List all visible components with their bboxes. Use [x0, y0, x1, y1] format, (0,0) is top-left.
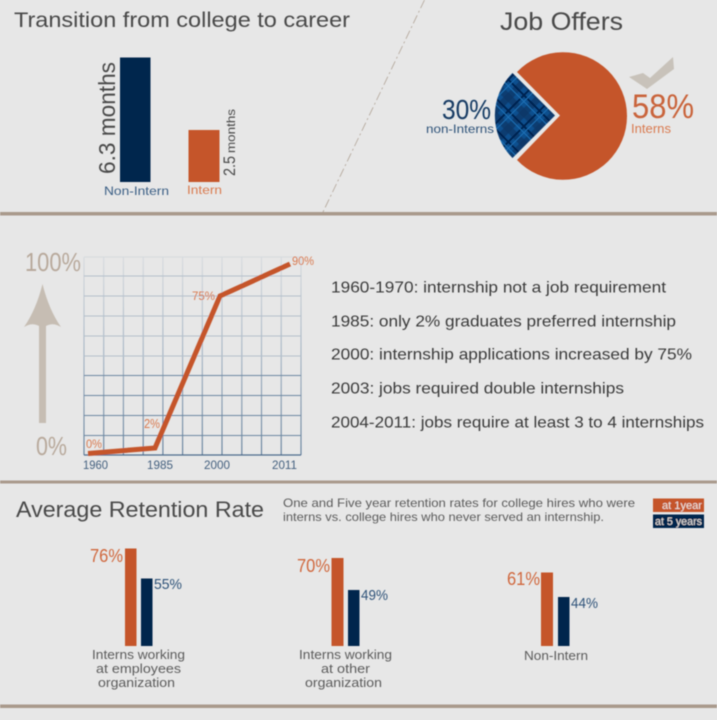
x-axis labels: 2000	[204, 458, 230, 472]
pie slice: interns	[517, 52, 627, 180]
label: 0%: 0%	[36, 431, 67, 461]
panel: job offers	[426, 8, 694, 180]
value: 30% non-interns: non-Interns	[426, 122, 494, 136]
group: non-intern	[507, 569, 598, 663]
arrow: 0 to 100 percent scale	[24, 284, 61, 423]
point labels: 90%	[292, 254, 314, 268]
trend line	[88, 264, 290, 454]
group: interns at employer: Interns working	[92, 647, 185, 662]
group: interns at other organization: 49%	[361, 587, 388, 604]
group: interns at other organization: at other	[321, 661, 371, 676]
value: 30% non-interns	[426, 94, 494, 136]
group: non-intern: Non-Intern	[524, 648, 588, 663]
x-axis labels	[83, 458, 297, 472]
dashed diagonal separator	[323, 0, 424, 212]
heading: retention: Average Retention Rate	[16, 497, 264, 522]
label: intern: Intern	[187, 183, 222, 197]
point labels: 0%	[86, 437, 102, 451]
legend: at 1year	[662, 500, 702, 512]
pie slice: non-interns	[495, 73, 555, 158]
group: interns at other organization: organization	[305, 675, 382, 690]
heading: job offers: Job Offers	[500, 8, 623, 36]
section divider: bottom	[0, 704, 717, 708]
point labels	[86, 254, 314, 451]
text block: internship timeline: 2003: jobs required double internships	[331, 380, 624, 398]
value: 58% interns: 58%	[632, 88, 694, 126]
heading: transition: Transition from college to career	[14, 9, 350, 32]
point labels: 75%	[192, 289, 215, 303]
panel: average retention rate	[16, 496, 704, 690]
point labels: 2%	[144, 416, 160, 431]
group: interns at employer	[90, 546, 185, 690]
panel: internship trend chart	[24, 247, 314, 472]
group: non-intern: 61%	[507, 569, 540, 589]
x-axis labels: 1985	[147, 458, 173, 472]
text block: internship timeline	[331, 280, 704, 432]
section divider: middle	[0, 480, 717, 484]
group: interns at other organization	[297, 556, 392, 690]
section divider: top	[0, 212, 717, 216]
value: 6.3 months: 6.3 months	[94, 62, 120, 174]
group: interns at other organization: 70%	[297, 556, 330, 576]
group: interns at other organization: Interns working	[299, 647, 392, 662]
label: non-intern: Non-Intern	[104, 184, 169, 198]
value: 58% interns: Interns	[631, 122, 671, 136]
group: interns at employer: organization	[98, 675, 175, 690]
panel: transition from college to career	[14, 9, 350, 198]
text block: internship timeline: 1985: only 2% graduates preferred internship	[331, 314, 676, 330]
group: interns at employer: at employees	[96, 661, 182, 676]
value: 2.5 months	[220, 109, 239, 176]
text block: internship timeline: 1960-1970: internship not a job requirement	[331, 280, 667, 296]
group: non-intern: 44%	[571, 595, 598, 612]
description: One and Five year retention rates for college hires who were	[283, 496, 635, 510]
value: 30% non-interns: 30%	[442, 94, 491, 125]
value: 2.5 months: 2.5	[220, 156, 239, 176]
group: interns at employer: 55%	[154, 576, 182, 593]
description: interns vs. college hires who never served an internship.	[283, 510, 604, 524]
bar: non-intern	[120, 58, 150, 182]
group: interns at employer: 76%	[90, 546, 123, 566]
bar: intern	[188, 130, 220, 182]
text block: internship timeline: 2004-2011: jobs require at least 3 to 4 internships	[331, 414, 704, 432]
value: 2.5 months: months	[224, 109, 238, 153]
text block: internship timeline: 2000: internship applications increased by 75%	[331, 346, 692, 364]
legend: at 5 years	[655, 516, 702, 528]
legend	[653, 498, 704, 528]
line chart grid	[84, 257, 301, 455]
description	[283, 496, 635, 524]
label: 100%: 100%	[25, 247, 81, 277]
icon: check mark	[629, 57, 674, 89]
x-axis labels: 1960	[83, 458, 108, 472]
x-axis labels: 2011	[272, 458, 297, 472]
